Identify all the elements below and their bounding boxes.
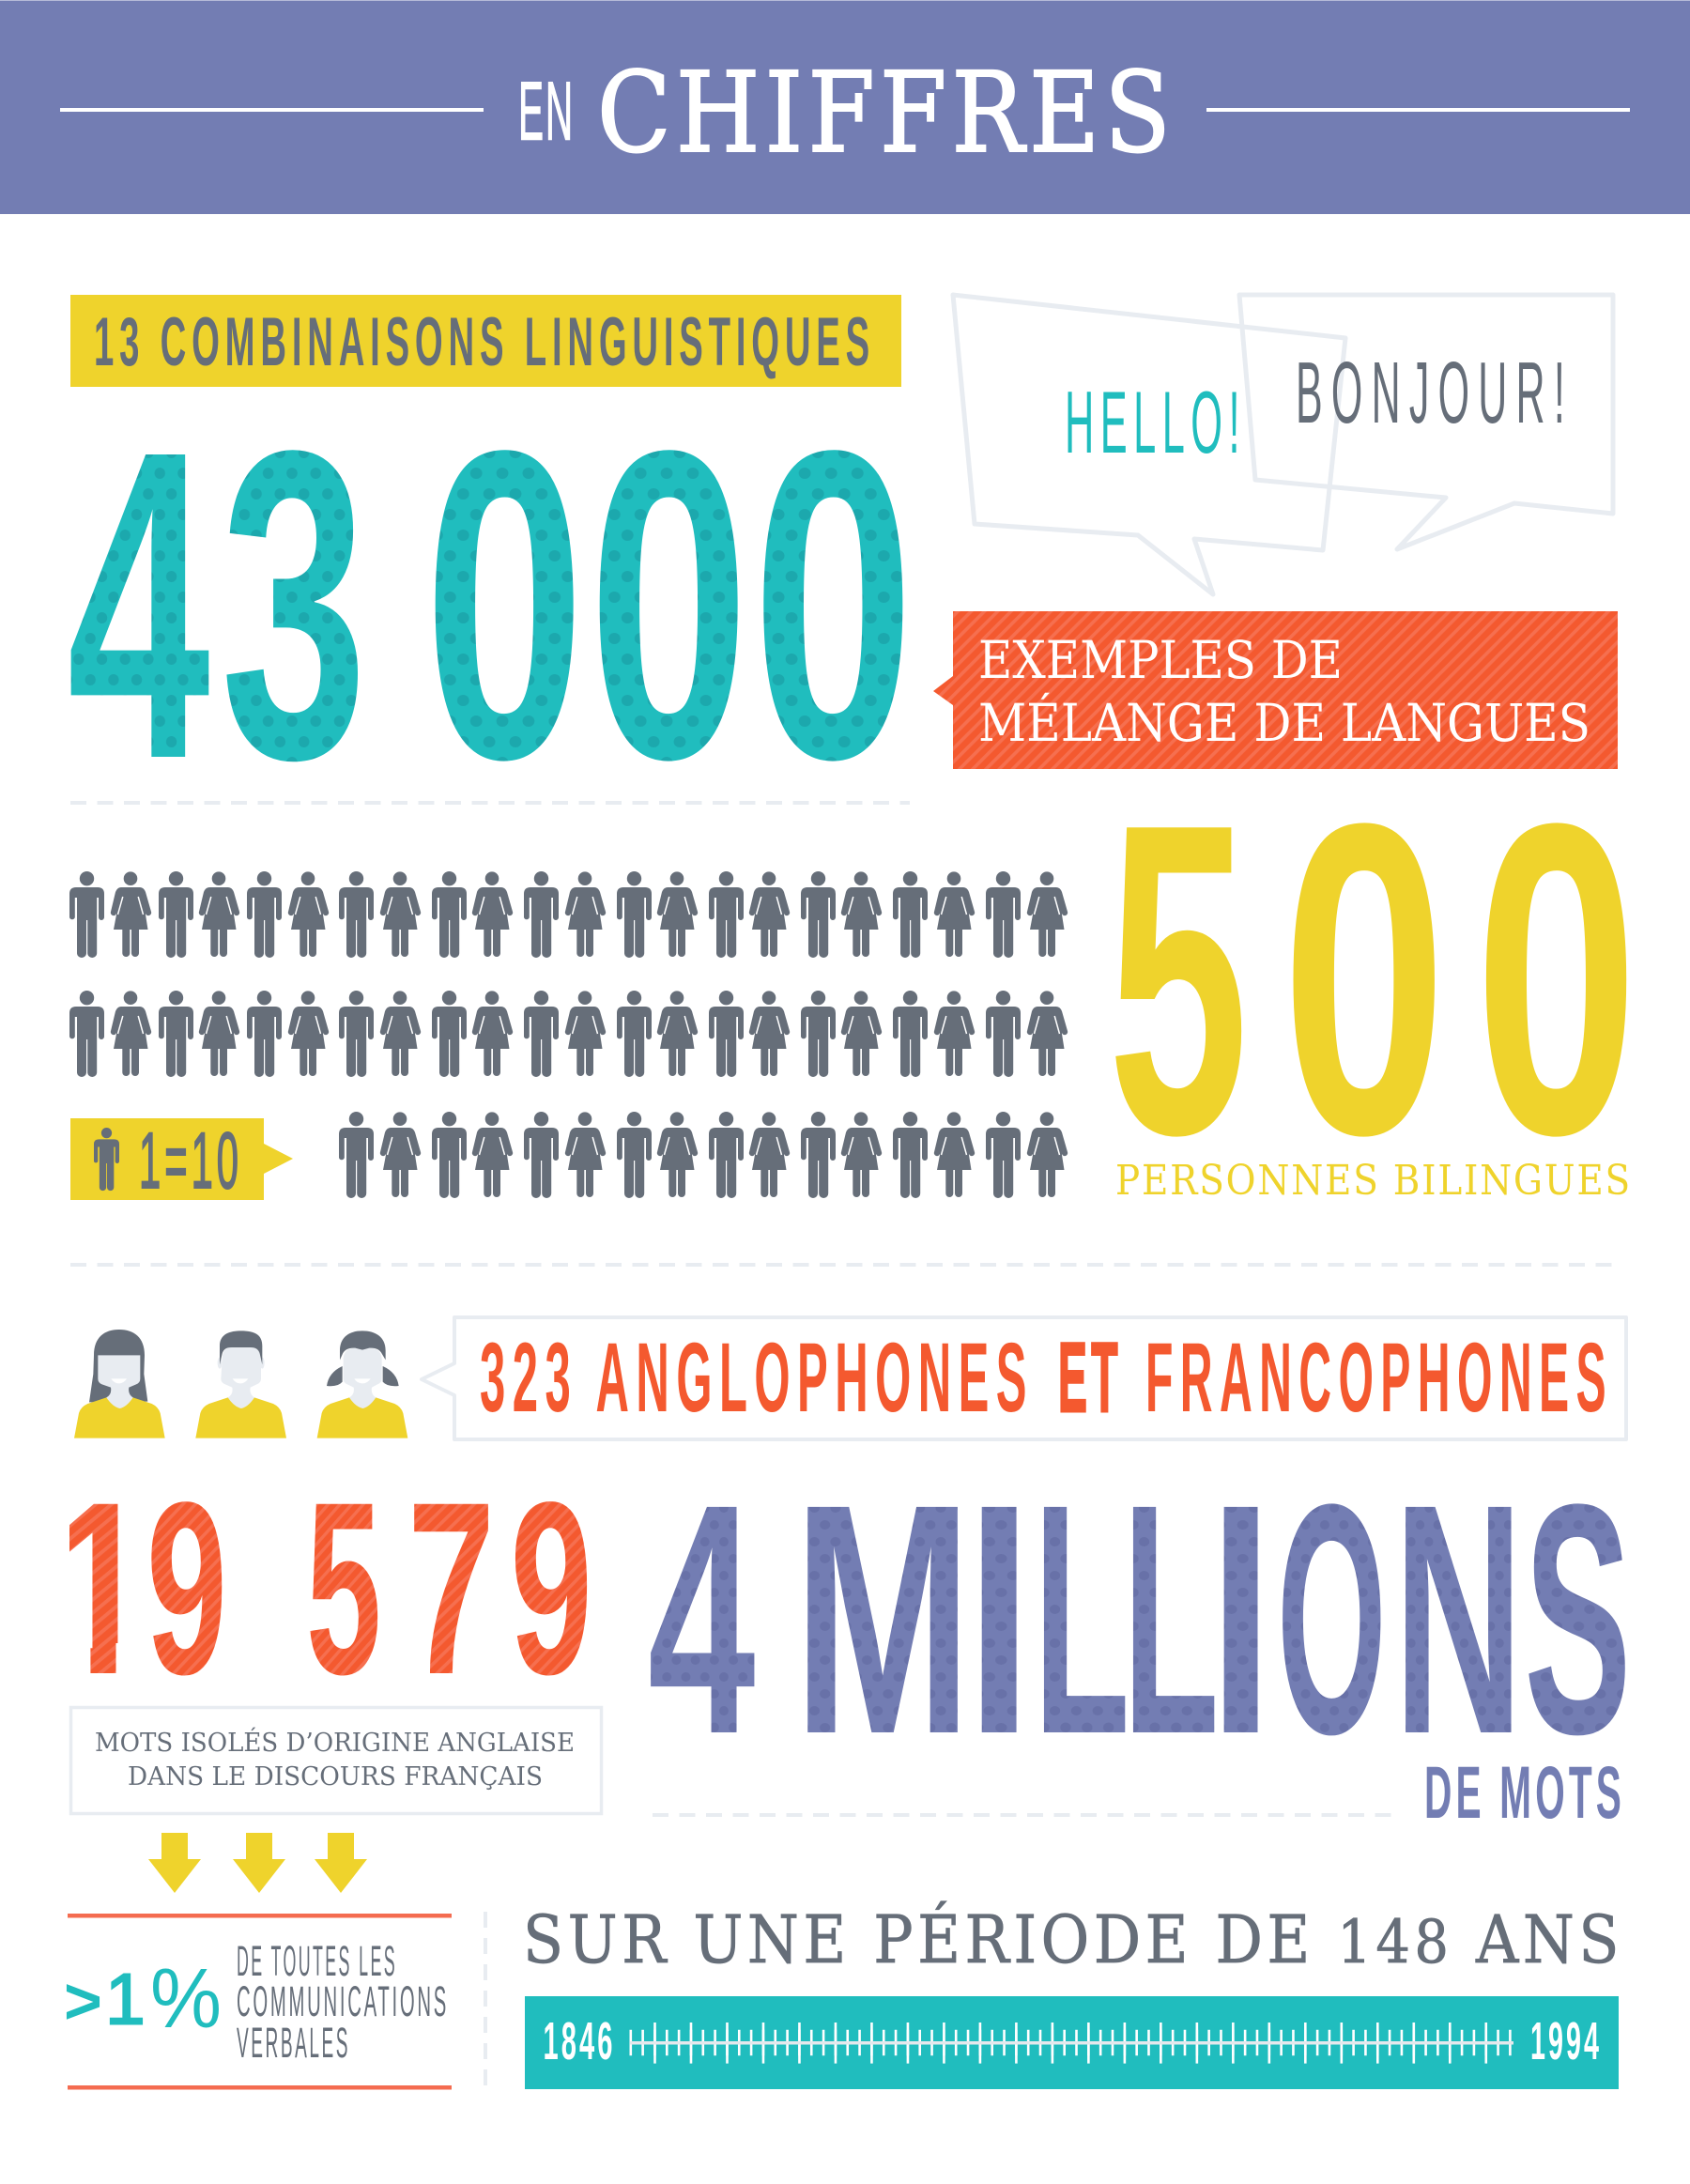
legend tag: 1=10: 1=10 — [139, 1116, 242, 1205]
number: 43 000: 0 — [424, 360, 585, 851]
caption box: mots isoles: DANS LE DISCOURS FRANÇAIS — [128, 1762, 543, 1792]
number: 4 millions: N — [1393, 1436, 1523, 1802]
number: 19 579: 9 — [511, 1450, 592, 1726]
number: 19 579 — [50, 1450, 592, 1727]
number: 500 — [1108, 731, 1638, 1227]
number: 19 579: 1 — [50, 1452, 152, 1727]
bubble: bonjour — [1239, 295, 1613, 549]
icon: person — [94, 1128, 119, 1191]
banner: 13 combinaisons: 13 COMBINAISONS LINGUISTIQUES — [94, 304, 875, 380]
title: CHIFFRES — [597, 48, 1175, 177]
text: HELLO! — [1065, 373, 1246, 471]
callout: exemples de melange: EXEMPLES DE — [978, 630, 1343, 690]
number: 500: 5 — [1108, 732, 1249, 1227]
ruler ticks — [629, 2030, 1513, 2056]
bubble: hello — [953, 295, 1345, 594]
callout: 323 anglophones et francophones: ET — [1058, 1323, 1122, 1433]
title: EN — [518, 64, 575, 158]
stat: less than 1 percent — [64, 1914, 452, 2090]
caption box: mots isoles — [71, 1707, 601, 1814]
avatar: boy — [195, 1330, 286, 1438]
stat: less than 1 percent: 1 — [105, 1960, 146, 2040]
stat: less than 1 percent: > — [64, 1964, 102, 2038]
number: 4 millions: L — [1034, 1437, 1129, 1803]
row 3 — [339, 1112, 1068, 1198]
pictogram rows: people — [69, 871, 1068, 1198]
number: 19 579: 9 — [146, 1450, 227, 1726]
stat: less than 1 percent: DE TOUTES LES — [237, 1937, 397, 1985]
timeline bar: 1846 — [543, 2011, 616, 2071]
arrows down — [148, 1833, 367, 1893]
number: 43 000 — [68, 360, 914, 851]
number: 4 millions: M — [793, 1437, 972, 1803]
callout: 323 anglophones et francophones: 323 ANGLOPHONES — [480, 1323, 1034, 1433]
number: 43 000: 0 — [588, 360, 749, 851]
row 1 — [69, 871, 1068, 958]
caption: personnes bilingues: PERSONNES BILINGUES — [1115, 1157, 1632, 1205]
number: 19 579: 7 — [407, 1451, 495, 1726]
callout: exemples de melange — [933, 611, 1618, 769]
avatar: girl pigtails — [317, 1330, 407, 1438]
number: 4 millions: S — [1524, 1437, 1631, 1803]
number: 4 millions: 4 — [648, 1437, 757, 1802]
text: COMMUNICATIONS — [237, 1977, 449, 2025]
mask: trims digit 1 to the reference silhouette — [47, 1498, 148, 1681]
timeline bar — [525, 1996, 1619, 2089]
number: 4 millions — [648, 1436, 1631, 1803]
stat: less than 1 percent: % — [150, 1952, 222, 2046]
caption box: mots isoles: MOTS ISOLÉS D’ORIGINE ANGLAISE — [95, 1727, 575, 1758]
stat: less than 1 percent: VERBALES — [237, 2019, 350, 2067]
number: 4 millions: I — [1208, 1438, 1273, 1803]
number: 19 579: 5 — [306, 1451, 381, 1726]
number: 43 000: 0 — [752, 360, 914, 851]
number: 4 millions: L — [1123, 1437, 1219, 1803]
legend tag: 1=10 — [70, 1116, 293, 1205]
timeline bar: 1994 — [1530, 2011, 1602, 2071]
speech bubbles — [953, 295, 1613, 594]
number: 500: 0 — [1282, 732, 1447, 1227]
row 2 — [69, 991, 1068, 1077]
number: 43 000: 4 — [68, 361, 212, 851]
number: 43 000: 3 — [221, 360, 367, 850]
number: 500: 0 — [1474, 731, 1638, 1226]
number: 4 millions: I — [966, 1436, 1033, 1802]
avatar: girl long hair — [74, 1330, 165, 1438]
number: 4 millions: O — [1277, 1436, 1387, 1802]
avatars — [74, 1330, 407, 1438]
banner: 13 combinaisons — [70, 295, 901, 387]
callout: exemples de melange: MÉLANGE DE LANGUES — [978, 693, 1590, 753]
heading: sur une periode: SUR UNE PÉRIODE DE 148 ANS — [523, 1901, 1623, 1978]
header band — [0, 0, 1690, 214]
